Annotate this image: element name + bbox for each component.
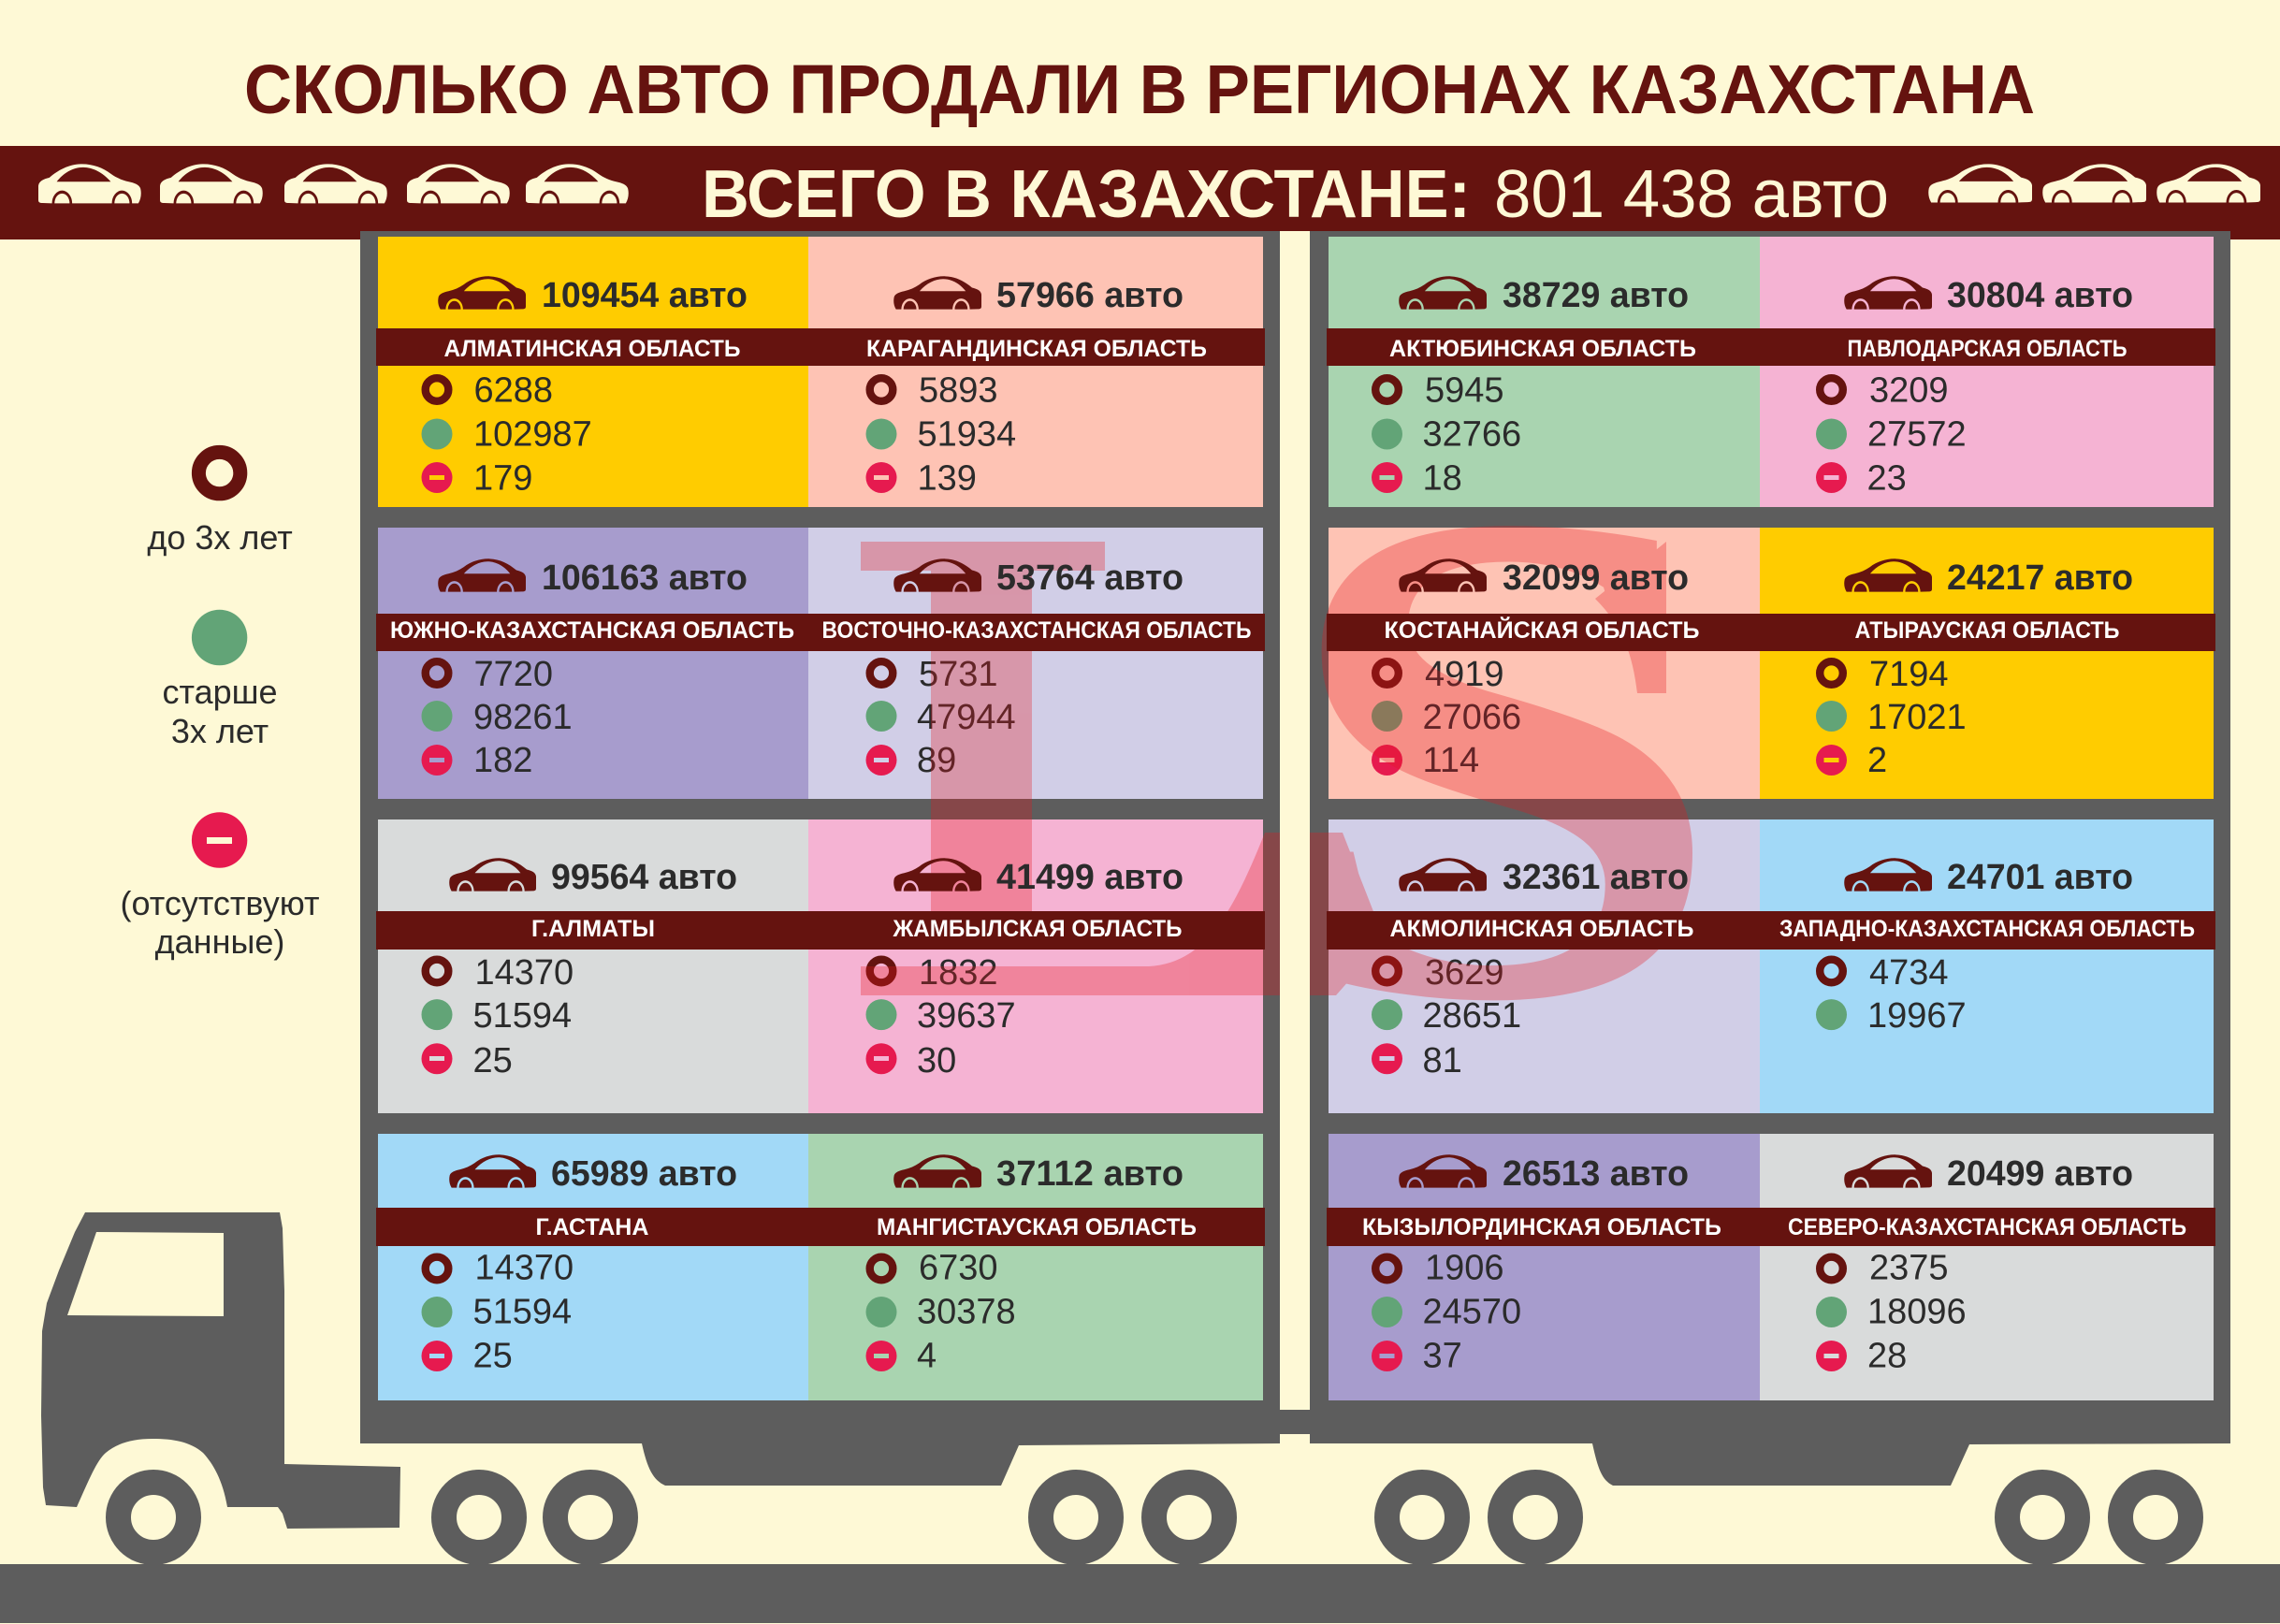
region label: Г.АСТАНА [535, 1214, 649, 1240]
row: no data: 139 [917, 458, 977, 498]
row: up to 3 years [870, 370, 998, 410]
title: СКОЛЬКО АВТО ПРОДАЛИ В РЕГИОНАХ КАЗАХСТАНА [244, 51, 2035, 128]
panel: Мангистауская [808, 1134, 1263, 1400]
row: no data [421, 1041, 513, 1080]
row: up to 3 years [426, 953, 574, 993]
row: up to 3 years [1820, 655, 1949, 694]
region label: АЛМАТИНСКАЯ ОБЛАСТЬ [443, 336, 741, 362]
panel: Алматинская [378, 237, 808, 507]
row: older [1816, 698, 1967, 737]
region label: ЖАМБЫЛСКАЯ ОБЛАСТЬ [893, 916, 1183, 942]
row: up to 3 years [1820, 1248, 1949, 1287]
total: Павлодарская [1844, 276, 2133, 315]
total: Мангистауская [893, 1154, 1184, 1194]
region label: ЮЖНО-КАЗАХСТАНСКАЯ ОБЛАСТЬ [390, 617, 794, 644]
row: older: 51594 [473, 996, 572, 1036]
panel: Костанайская [1329, 528, 1760, 799]
total: Алматинская: 109454 авто [542, 276, 748, 315]
region name bands [376, 328, 2215, 1246]
watermark: S [1275, 364, 1727, 1146]
row: up to 3 years [1820, 370, 1949, 410]
row: older: 17021 [1867, 698, 1967, 737]
row: older: 30378 [917, 1293, 1016, 1332]
row: up to 3 years [426, 655, 553, 694]
total: Мангистауская: 37112 авто [996, 1154, 1184, 1194]
total: Карагандинская: 57966 авто [996, 276, 1184, 315]
region label: АТЫРАУСКАЯ ОБЛАСТЬ [1854, 617, 2120, 644]
row: up to 3 years: 14370 [475, 1248, 574, 1287]
total: Костанайская: 32099 авто [1503, 558, 1689, 598]
panel: Акмолинская [1329, 819, 1760, 1113]
row: no data: 81 [1422, 1041, 1462, 1080]
row: no data [866, 741, 956, 780]
row: no data [1372, 458, 1462, 498]
total: г.Алматы: 99564 авто [551, 858, 737, 897]
wheels [118, 1482, 2191, 1553]
row: older [866, 698, 1016, 737]
row: no data: 114 [1422, 741, 1479, 780]
legend label: older than 3 years: 3х лет [171, 712, 269, 750]
row: no data [1372, 1336, 1462, 1375]
row: no data [1816, 458, 1907, 498]
total: Северо-Казахстанская [1844, 1154, 2133, 1194]
total: Южно-Казахстанская [438, 558, 748, 598]
row: no data: 37 [1422, 1336, 1462, 1375]
totals with car icons [438, 276, 2133, 1194]
region label: ВОСТОЧНО-КАЗАХСТАНСКАЯ ОБЛАСТЬ [821, 617, 1252, 644]
row: no data [421, 741, 532, 780]
region label: АКМОЛИНСКАЯ ОБЛАСТЬ [1390, 916, 1694, 942]
row: no data [421, 458, 532, 498]
row: up to 3 years [426, 370, 553, 410]
legend label: no data: (отсутствуют [121, 884, 319, 922]
row: no data [866, 1336, 937, 1375]
row: up to 3 years: 3209 [1869, 370, 1949, 410]
row: up to 3 years [1820, 953, 1949, 993]
row: older [1816, 415, 1967, 455]
row: no data [1816, 1336, 1907, 1375]
row: older: 98261 [473, 698, 573, 737]
total: Жамбылская [893, 858, 1184, 897]
row: no data: 25 [473, 1041, 513, 1080]
row: older: 19967 [1867, 996, 1967, 1036]
row: up to 3 years [426, 1248, 574, 1287]
total: Атырауская: 24217 авто [1947, 558, 2133, 598]
row: no data: 179 [473, 458, 532, 498]
row: no data [866, 1041, 956, 1080]
row: up to 3 years: 1832 [919, 953, 998, 993]
row: up to 3 years [1375, 370, 1504, 410]
total: г.Астана [449, 1154, 737, 1194]
row: no data: 25 [473, 1336, 513, 1375]
total: Восточно-Казахстанская [893, 558, 1184, 598]
row: older: 51594 [473, 1293, 572, 1332]
row: up to 3 years: 14370 [475, 953, 574, 993]
panel: Северо-Казахстанская [1760, 1134, 2214, 1400]
panel: Восточно-Казахстанская [808, 528, 1263, 799]
row: no data [1372, 1041, 1462, 1080]
row: up to 3 years: 5893 [919, 370, 998, 410]
row: no data [421, 1336, 513, 1375]
row: older [866, 1293, 1016, 1332]
row: older: 28651 [1422, 996, 1521, 1036]
panel: Западно-Казахстанская [1760, 819, 2214, 1113]
icon: no data legend [192, 812, 247, 868]
row: older [421, 1293, 572, 1332]
row: no data [1816, 741, 1887, 780]
row: older: 51934 [917, 415, 1016, 455]
panel: Южно-Казахстанская [378, 528, 808, 799]
road [0, 1564, 2280, 1623]
total: Западно-Казахстанская [1844, 858, 2133, 897]
total: Кызылординская [1399, 1154, 1689, 1194]
total: Акмолинская [1399, 858, 1689, 897]
row: up to 3 years [870, 1248, 998, 1287]
region label: ЗАПАДНО-КАЗАХСТАНСКАЯ ОБЛАСТЬ [1779, 916, 2195, 942]
panel: Кызылординская [1329, 1134, 1760, 1400]
row: older: 27572 [1867, 415, 1967, 455]
row: up to 3 years [870, 655, 998, 694]
panel: Павлодарская [1760, 237, 2214, 507]
row: up to 3 years [1375, 655, 1504, 694]
row: up to 3 years: 5731 [919, 655, 998, 694]
row: no data [866, 458, 977, 498]
total: Актюбинская [1399, 276, 1689, 315]
row: older [421, 698, 573, 737]
row: older [866, 415, 1016, 455]
legend label: up to 3 years: до 3х лет [147, 518, 293, 557]
row: older [1372, 698, 1521, 737]
row: older: 39637 [917, 996, 1016, 1036]
region label: МАНГИСТАУСКАЯ ОБЛАСТЬ [877, 1214, 1197, 1240]
row: up to 3 years: 7194 [1869, 655, 1949, 694]
total: Северо-Казахстанская: 20499 авто [1947, 1154, 2133, 1194]
total: Атырауская [1844, 558, 2133, 598]
row: no data: 89 [917, 741, 956, 780]
row: up to 3 years: 1906 [1425, 1248, 1504, 1287]
trailer frame left [360, 231, 1310, 1486]
total: Карагандинская [893, 276, 1184, 315]
panel: г.Алматы [378, 819, 808, 1113]
region label: АКТЮБИНСКАЯ ОБЛАСТЬ [1389, 336, 1696, 362]
region label: КАРАГАНДИНСКАЯ ОБЛАСТЬ [866, 336, 1207, 362]
row: up to 3 years: 6288 [473, 370, 553, 410]
row: no data: 28 [1867, 1336, 1907, 1375]
row: no data: 30 [917, 1041, 956, 1080]
row: older [1372, 415, 1521, 455]
total: Южно-Казахстанская: 106163 авто [542, 558, 748, 598]
total: г.Астана: 65989 авто [551, 1154, 737, 1194]
row: older [1816, 996, 1967, 1036]
row: no data: 18 [1422, 458, 1462, 498]
row: older: 27066 [1422, 698, 1521, 737]
row: older [866, 996, 1016, 1036]
gap between trailers [1280, 231, 1310, 1410]
row: older: 18096 [1867, 1293, 1967, 1332]
total: г.Алматы [449, 858, 737, 897]
total: Алматинская [438, 276, 748, 315]
icon: ring legend [198, 452, 240, 494]
row: older [1372, 996, 1521, 1036]
panel: Атырауская [1760, 528, 2214, 799]
icon: cars row left [38, 164, 629, 203]
legend label: older than 3 years: старше [162, 673, 278, 711]
row: older: 32766 [1422, 415, 1521, 455]
row: older: 24570 [1422, 1293, 1521, 1332]
row: up to 3 years: 3629 [1425, 953, 1504, 993]
row: older [421, 996, 572, 1036]
total: Павлодарская: 30804 авто [1947, 276, 2133, 315]
row: up to 3 years: 7720 [473, 655, 553, 694]
legend label: no data: данные) [155, 922, 284, 961]
banner heading: ВСЕГО В КАЗАХСТАНЕ: [702, 157, 1471, 232]
row: older [1816, 1293, 1967, 1332]
row: no data: 4 [917, 1336, 937, 1375]
row: up to 3 years [1375, 1248, 1504, 1287]
panel: Карагандинская [808, 237, 1263, 507]
region label: Г.АЛМАТЫ [531, 916, 655, 942]
panel: Актюбинская [1329, 237, 1760, 507]
total: Актюбинская: 38729 авто [1503, 276, 1689, 315]
total banner [0, 146, 2280, 239]
icon: cars row right [1928, 164, 2260, 202]
total: Кызылординская: 26513 авто [1503, 1154, 1689, 1194]
banner total: 801 438 авто [1494, 157, 1889, 232]
row: up to 3 years [870, 953, 998, 993]
total: Жамбылская: 41499 авто [996, 858, 1184, 897]
region label: ПАВЛОДАРСКАЯ ОБЛАСТЬ [1847, 336, 2128, 362]
total: Восточно-Казахстанская: 53764 авто [996, 558, 1184, 598]
panel: г.Астана [378, 1134, 808, 1400]
total: Западно-Казахстанская: 24701 авто [1947, 858, 2133, 897]
legend [121, 452, 319, 961]
row: up to 3 years: 6730 [919, 1248, 998, 1287]
row: up to 3 years: 2375 [1869, 1248, 1949, 1287]
truck cab [41, 1212, 400, 1529]
total: Костанайская [1399, 558, 1689, 598]
row: no data [1372, 741, 1479, 780]
row: older: 102987 [473, 415, 592, 455]
row: older: 47944 [917, 698, 1016, 737]
row: up to 3 years: 4734 [1869, 953, 1949, 993]
watermark: I [848, 399, 1109, 1141]
region label: КЫЗЫЛОРДИНСКАЯ ОБЛАСТЬ [1362, 1214, 1721, 1240]
row: up to 3 years [1375, 953, 1504, 993]
row: older [421, 415, 592, 455]
trailer frame right [1310, 231, 2230, 1486]
total: Акмолинская: 32361 авто [1503, 858, 1689, 897]
row: older [1372, 1293, 1521, 1332]
row: up to 3 years: 5945 [1425, 370, 1504, 410]
icon: green legend [192, 610, 247, 665]
row: no data: 182 [473, 741, 532, 780]
region label: КОСТАНАЙСКАЯ ОБЛАСТЬ [1385, 616, 1700, 644]
row: no data: 23 [1867, 458, 1907, 498]
watermark [861, 526, 1692, 1001]
row: up to 3 years: 4919 [1425, 655, 1504, 694]
region label: СЕВЕРО-КАЗАХСТАНСКАЯ ОБЛАСТЬ [1788, 1214, 2186, 1240]
panel: Жамбылская [808, 819, 1263, 1113]
row: no data: 2 [1867, 741, 1887, 780]
